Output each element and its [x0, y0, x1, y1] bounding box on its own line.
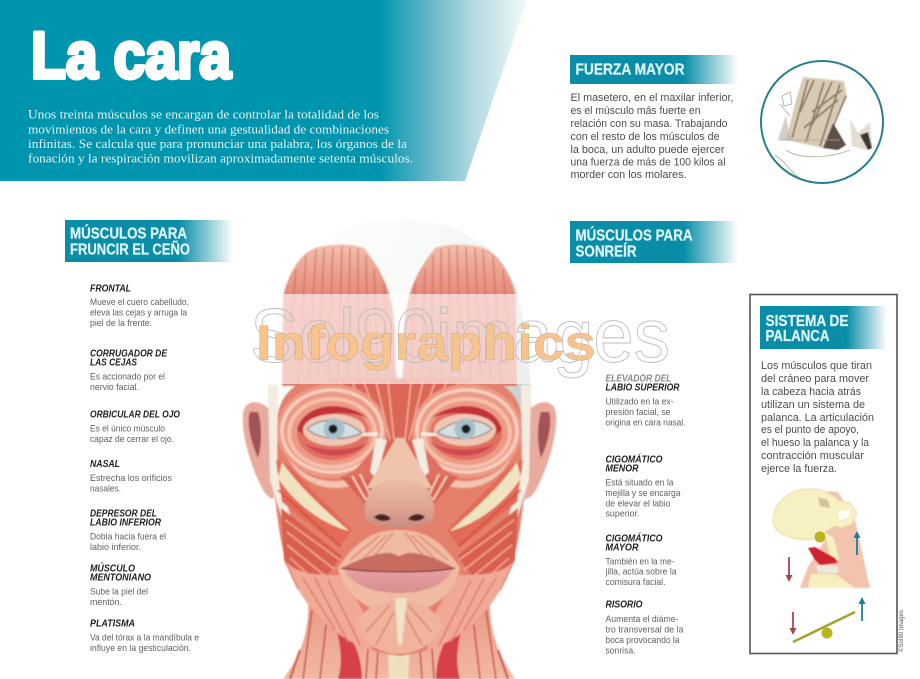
nasal: NASAL — [90, 459, 120, 470]
platisma: influye en la gesticulación. — [90, 643, 191, 653]
risorio: tro transversal de la — [606, 624, 684, 634]
fuerza mayor text: una fuerza de más de 100 kilos al — [570, 156, 726, 168]
nasal: nasales. — [90, 484, 121, 494]
intro text: movimientos de la cara y definen una gestualidad de combinaciones — [28, 122, 389, 136]
banner background — [0, 0, 527, 181]
upper lip — [342, 553, 454, 571]
nasal bridge — [367, 438, 432, 488]
palanca text: ejerce la fuerza. — [761, 463, 837, 475]
jaw — [285, 560, 372, 650]
eye — [307, 420, 362, 439]
frontal: eleva las cejas y arruga la — [90, 308, 187, 318]
elevador: presión facial, se — [606, 407, 670, 417]
fuerza mayor text — [570, 92, 734, 181]
depresor: labio inferior. — [90, 542, 141, 552]
nasal — [90, 459, 172, 494]
intro text: fonación y la respiración movilizan aproximadamente setenta músculos. — [28, 150, 413, 166]
depresor — [90, 508, 166, 552]
palanca text: palanca. La articulación — [761, 412, 874, 424]
cigomático menor — [606, 452, 680, 518]
fuerza mayor text: la boca, un adulto puede ejercer — [570, 144, 725, 156]
depresor: LABIO INFERIOR — [90, 518, 162, 528]
heading: músculos para sonreír: SONREÍR — [576, 242, 637, 260]
cigomático mayor — [605, 532, 676, 587]
cigomático menor: de elevar el labio — [606, 498, 670, 508]
intro text — [28, 106, 413, 166]
right muscle list — [605, 374, 686, 656]
risorio: Aumenta el diáme- — [606, 614, 678, 624]
orbicular: Es el único músculo — [90, 424, 165, 434]
temple tendon — [268, 385, 294, 528]
mentoniano: mentón. — [90, 597, 122, 607]
frontal: FRONTAL — [90, 284, 131, 294]
blue arrow — [854, 531, 860, 555]
elevador: Utilizado en la ex- — [606, 396, 674, 406]
corrugador: CORRUGADOR DE — [90, 348, 167, 360]
face illustration — [243, 219, 670, 679]
mentoniano: Sube la piel del — [90, 586, 148, 596]
skull — [268, 219, 531, 500]
mirrored right half of muscles — [399, 244, 556, 656]
corrugador: LAS CEJAS — [90, 358, 137, 368]
palanca text: el hueso la palanca y la — [761, 437, 870, 449]
mentoniano — [90, 562, 151, 607]
risorio: RISORIO — [606, 600, 643, 610]
palanca text: contracción muscular — [761, 450, 864, 462]
elevador: LABIO SUPERIOR — [606, 382, 680, 394]
mouth line — [341, 568, 455, 572]
depresor: DEPRESOR DEL — [90, 508, 157, 520]
cigomático menor: CIGOMÁTICO — [606, 452, 663, 466]
lower orbit bands — [288, 458, 382, 488]
cigomático mayor: CIGOMÁTICO — [606, 532, 663, 544]
cigomático menor: Está situado en la — [606, 478, 674, 488]
heading: sistema de palanca: SISTEMA DE — [766, 313, 849, 330]
chin — [356, 600, 442, 654]
depresor: Dobla hacia fuera el — [90, 532, 166, 542]
elevador: ELEVADOR DEL — [606, 374, 672, 384]
platisma — [90, 618, 199, 653]
risorio — [606, 600, 684, 656]
cigomático menor: mejilla y se encarga — [606, 488, 680, 498]
left muscle list — [90, 284, 199, 653]
palanca text — [761, 360, 874, 475]
cigomático mayor: También en la me- — [606, 556, 674, 566]
heading: fuerza mayor — [570, 55, 738, 84]
red arrow — [786, 557, 792, 582]
levator strips — [340, 440, 382, 490]
intro text: infinitas. Se calcula que para pronunciar una palabra, los órganos de la — [28, 136, 407, 151]
frontal: piel de la frente. — [90, 318, 152, 328]
cigomático menor: superior. — [606, 508, 640, 518]
palanca text: es el punto de apoyo, — [761, 424, 859, 436]
orbicular: capaz de cerrar el ojo. — [90, 434, 174, 444]
watermark: Infographics: Infographics — [256, 315, 596, 371]
credit: ©Sol90 Images — [897, 609, 905, 652]
heading: sistema de palanca: PALANCA — [766, 328, 830, 345]
heading: músculos para sonreír — [570, 221, 738, 263]
palanca text: la cabeza hacia atrás — [761, 386, 861, 398]
palanca text: Los músculos que tiran — [761, 360, 872, 372]
platisma: PLATISMA — [90, 618, 135, 630]
chin tendon — [395, 598, 407, 645]
corrugador: Es accionado por el — [90, 372, 165, 382]
watermark band — [266, 294, 532, 384]
lower lip — [344, 570, 453, 593]
frontal: Mueve el cuero cabelludo, — [90, 297, 189, 307]
heading: fuerza mayor: FUERZA MAYOR — [576, 62, 685, 78]
corrugador — [90, 348, 167, 392]
fuerza mayor text: morder con los molares. — [570, 169, 686, 181]
fuerza mayor text: es el músculo más fuerte en — [570, 105, 700, 117]
nose — [365, 479, 434, 528]
nasal: Estrecha los orificios — [90, 473, 172, 483]
heading: músculos para fruncir el ceño — [65, 220, 233, 262]
heading: músculos para fruncir el ceño: MÚSCULOS PARA — [70, 224, 187, 242]
heading: sistema de palanca — [760, 306, 887, 349]
left half of muscles — [243, 244, 400, 656]
corrugador: nervio facial. — [90, 382, 139, 392]
palanca text: del cráneo para mover — [761, 373, 869, 385]
procerus fan — [326, 378, 400, 470]
elevador: origina en cara nasal. — [606, 418, 686, 428]
cigomático mayor: jilla, actúa sobre la — [605, 566, 676, 576]
icon: masseter muscle circle — [761, 61, 883, 183]
icon: head tilted back with muscles — [773, 489, 870, 588]
lower cheek — [281, 508, 342, 590]
icon: lever diagram — [790, 597, 866, 642]
palanca text: utilizan un sistema de — [761, 399, 865, 411]
perioral muscle — [338, 530, 460, 614]
orbicularis — [277, 384, 387, 478]
title: La cara — [31, 18, 232, 92]
fuerza mayor text: con el resto de los músculos de — [570, 131, 720, 143]
elevador — [606, 374, 686, 428]
heading: músculos para fruncir el ceño: FRUNCIR EL CEÑO — [70, 238, 190, 258]
cigomático mayor: MAYOR — [606, 542, 639, 554]
zygomaticus major — [276, 460, 352, 548]
heading: músculos para sonreír: MÚSCULOS PARA — [576, 226, 693, 244]
mentoniano: MENTONIANO — [90, 572, 151, 584]
orbicular: ORBICULAR DEL OJO — [90, 410, 180, 420]
frontalis — [282, 244, 399, 386]
neck — [283, 590, 515, 679]
intro text: Unos treinta músculos se encargan de controlar la totalidad de los — [28, 106, 379, 122]
risorio: sonrisa. — [606, 646, 636, 656]
fuerza mayor text: El masetero, en el maxilar inferior, — [570, 92, 734, 104]
frontal — [90, 284, 189, 328]
cigomático menor: MENOR — [606, 464, 639, 474]
mentoniano: MÚSCULO — [90, 562, 135, 574]
platisma: Va del tórax a la mandíbula e — [90, 632, 199, 642]
risorio: boca provocando la — [606, 635, 680, 645]
pivot ball — [814, 532, 826, 542]
ear — [243, 402, 276, 499]
fuerza mayor text: relación con su masa. Trabajando — [570, 118, 728, 130]
orbicular — [90, 410, 180, 444]
muscle mask — [274, 378, 400, 656]
cigomático mayor: comisura facial. — [606, 577, 666, 587]
panel: sistema de palanca — [750, 294, 897, 654]
watermark: Sol90images: Sol90images — [250, 294, 670, 379]
